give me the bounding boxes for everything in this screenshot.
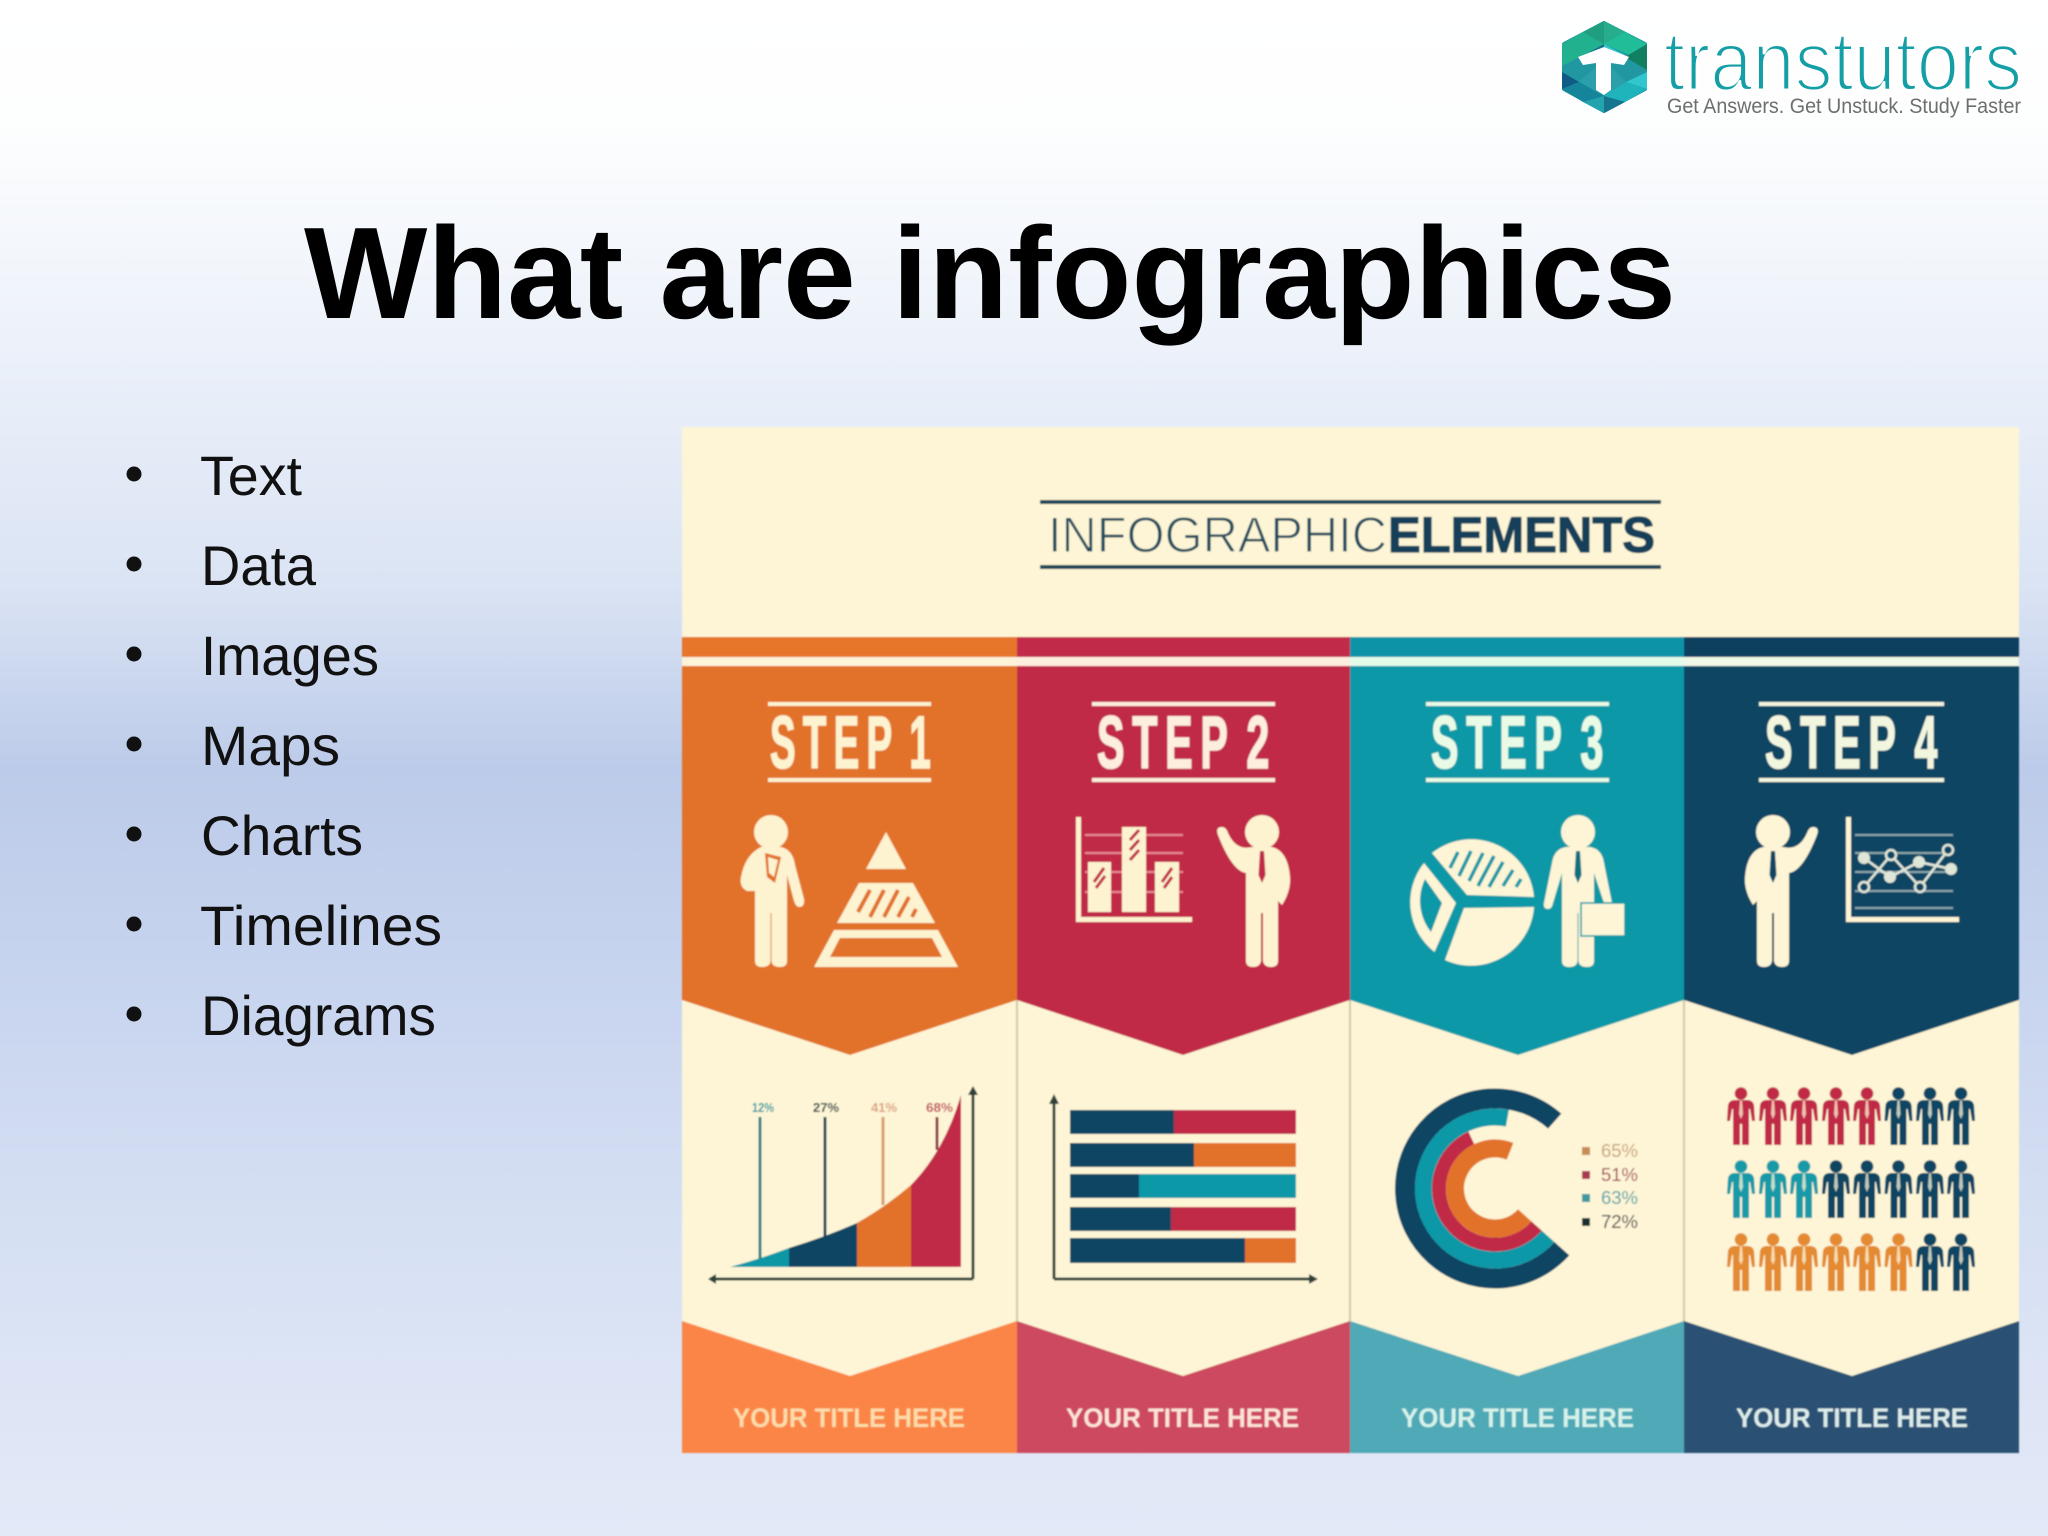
bullet: Images: Images [201, 624, 379, 687]
ring legend: 51% [1601, 1165, 1638, 1185]
logo: transtutors [1562, 14, 2022, 118]
chart: people pictogram grid [1727, 1087, 1975, 1291]
step 3 label: STEP 3 [1431, 701, 1611, 784]
bullet: Diagrams: Diagrams [201, 984, 436, 1047]
chart: stacked horizontal bars [1049, 1094, 1318, 1284]
footer: column 4: YOUR TITLE HERE [1736, 1403, 1968, 1433]
panel: step 3 banner [1350, 637, 1684, 1055]
heading text light: INFOGRAPHIC [1048, 507, 1387, 563]
step 1 label: STEP 1 [770, 701, 938, 784]
icon: person pointing at chart [1745, 815, 1818, 967]
footer: column 3 [1350, 1321, 1684, 1453]
panel: step 2 banner [1017, 637, 1350, 1055]
icon: person with clipboard [741, 815, 804, 967]
tagline: Get Answers. Get Unstuck. Study Faster [1667, 95, 2021, 118]
bullet: Charts: Charts [201, 804, 363, 867]
footer: column 4 [1684, 1321, 2019, 1453]
icon: pyramid [814, 832, 958, 967]
step 2 label: STEP 2 [1097, 701, 1277, 784]
label 68%: 68% [926, 1100, 953, 1115]
icon: hexagon logo mark [1562, 21, 1647, 113]
step 4 label [1759, 701, 1945, 784]
label 12%: 12% [752, 1100, 774, 1115]
bullet list [126, 444, 442, 1047]
icon: person with briefcase [1544, 815, 1625, 967]
footer: column 2 [1017, 1321, 1350, 1453]
bullet: Maps: Maps [201, 714, 340, 777]
label 27%: 27% [813, 1100, 839, 1115]
footer: column 2: YOUR TITLE HERE [1066, 1403, 1299, 1433]
footer: column 1: YOUR TITLE HERE [733, 1403, 965, 1433]
ring legend: 63% [1601, 1188, 1638, 1208]
bullet: Timelines: Timelines [200, 894, 442, 957]
step 1 label [768, 701, 938, 784]
footer: column 3: YOUR TITLE HERE [1401, 1403, 1634, 1433]
step 2 label [1092, 701, 1277, 784]
label 41%: 41% [871, 1100, 897, 1115]
heading text bold: ELEMENTS [1388, 507, 1655, 563]
icon: person pointing [1217, 815, 1290, 967]
ring legend: 72% [1601, 1212, 1638, 1232]
ring legend: 65% [1601, 1141, 1638, 1161]
footer: column 1 [682, 1321, 1017, 1453]
bullet: Text: Text [200, 444, 302, 507]
panel: step 1 banner [682, 637, 1017, 1055]
poster heading [1040, 500, 1661, 569]
icon: line chart [1846, 817, 1959, 922]
bullet: Data: Data [201, 534, 317, 597]
title: What are infographics [304, 200, 1676, 346]
icon: bar chart [1076, 817, 1192, 922]
icon: pie chart [1410, 839, 1534, 966]
panel: step 4 banner [1684, 637, 2019, 1055]
ring legend [1582, 1141, 1638, 1232]
chart: area curve with percentages [708, 1086, 978, 1284]
chart: radial rings [1405, 1098, 1638, 1278]
panel: infographic elements poster [682, 427, 2019, 1453]
step 3 label [1426, 701, 1611, 784]
